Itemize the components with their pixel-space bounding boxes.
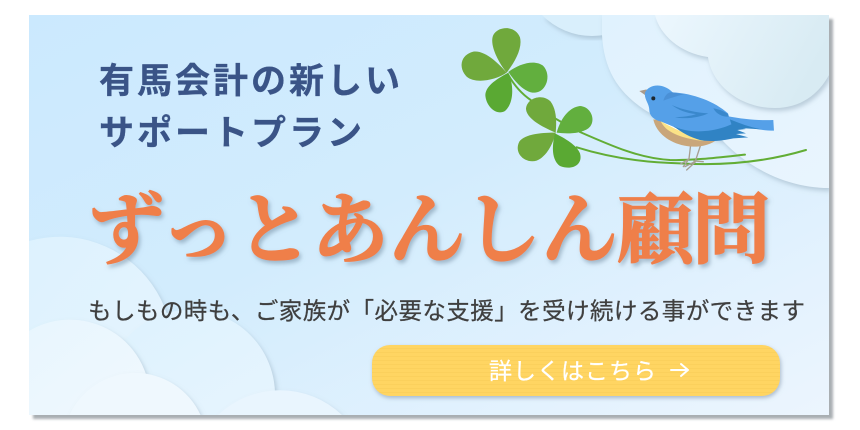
body [645, 86, 732, 133]
clover: lower [518, 97, 592, 168]
clouds: bottom left [29, 237, 342, 415]
heading [99, 62, 403, 153]
clouds: top right [542, 15, 829, 188]
wing dark feathers [663, 92, 685, 101]
tail [727, 116, 774, 131]
clover and stems [462, 28, 806, 168]
cloud: front left [29, 320, 150, 415]
button label: 詳しくはこちら [489, 358, 657, 384]
cloud: middle top right [602, 15, 829, 188]
bird legs [681, 145, 703, 170]
beak [639, 89, 647, 97]
eye [651, 96, 655, 100]
cloud: front top right [655, 15, 829, 108]
heading line 1: 有馬会計の新しい [99, 62, 403, 101]
cloud: front right lump [146, 374, 202, 415]
stems [508, 75, 806, 164]
button: details [372, 345, 780, 396]
cloud: back middle [166, 310, 278, 415]
cloud: back top [542, 15, 602, 40]
main title: ずっとあんしん顧問 [88, 188, 770, 274]
icon: arrow [671, 364, 688, 376]
belly [653, 119, 717, 147]
subtitle: もしもの時も、ご家族が「必要な支援」を受け続ける事ができます [88, 298, 805, 324]
icon: bluebird [639, 86, 774, 170]
cloud: back right lump [272, 390, 342, 415]
heading line 2: サポートプラン [99, 114, 365, 153]
cloud: back left [29, 237, 169, 340]
clover: upper [462, 28, 547, 112]
